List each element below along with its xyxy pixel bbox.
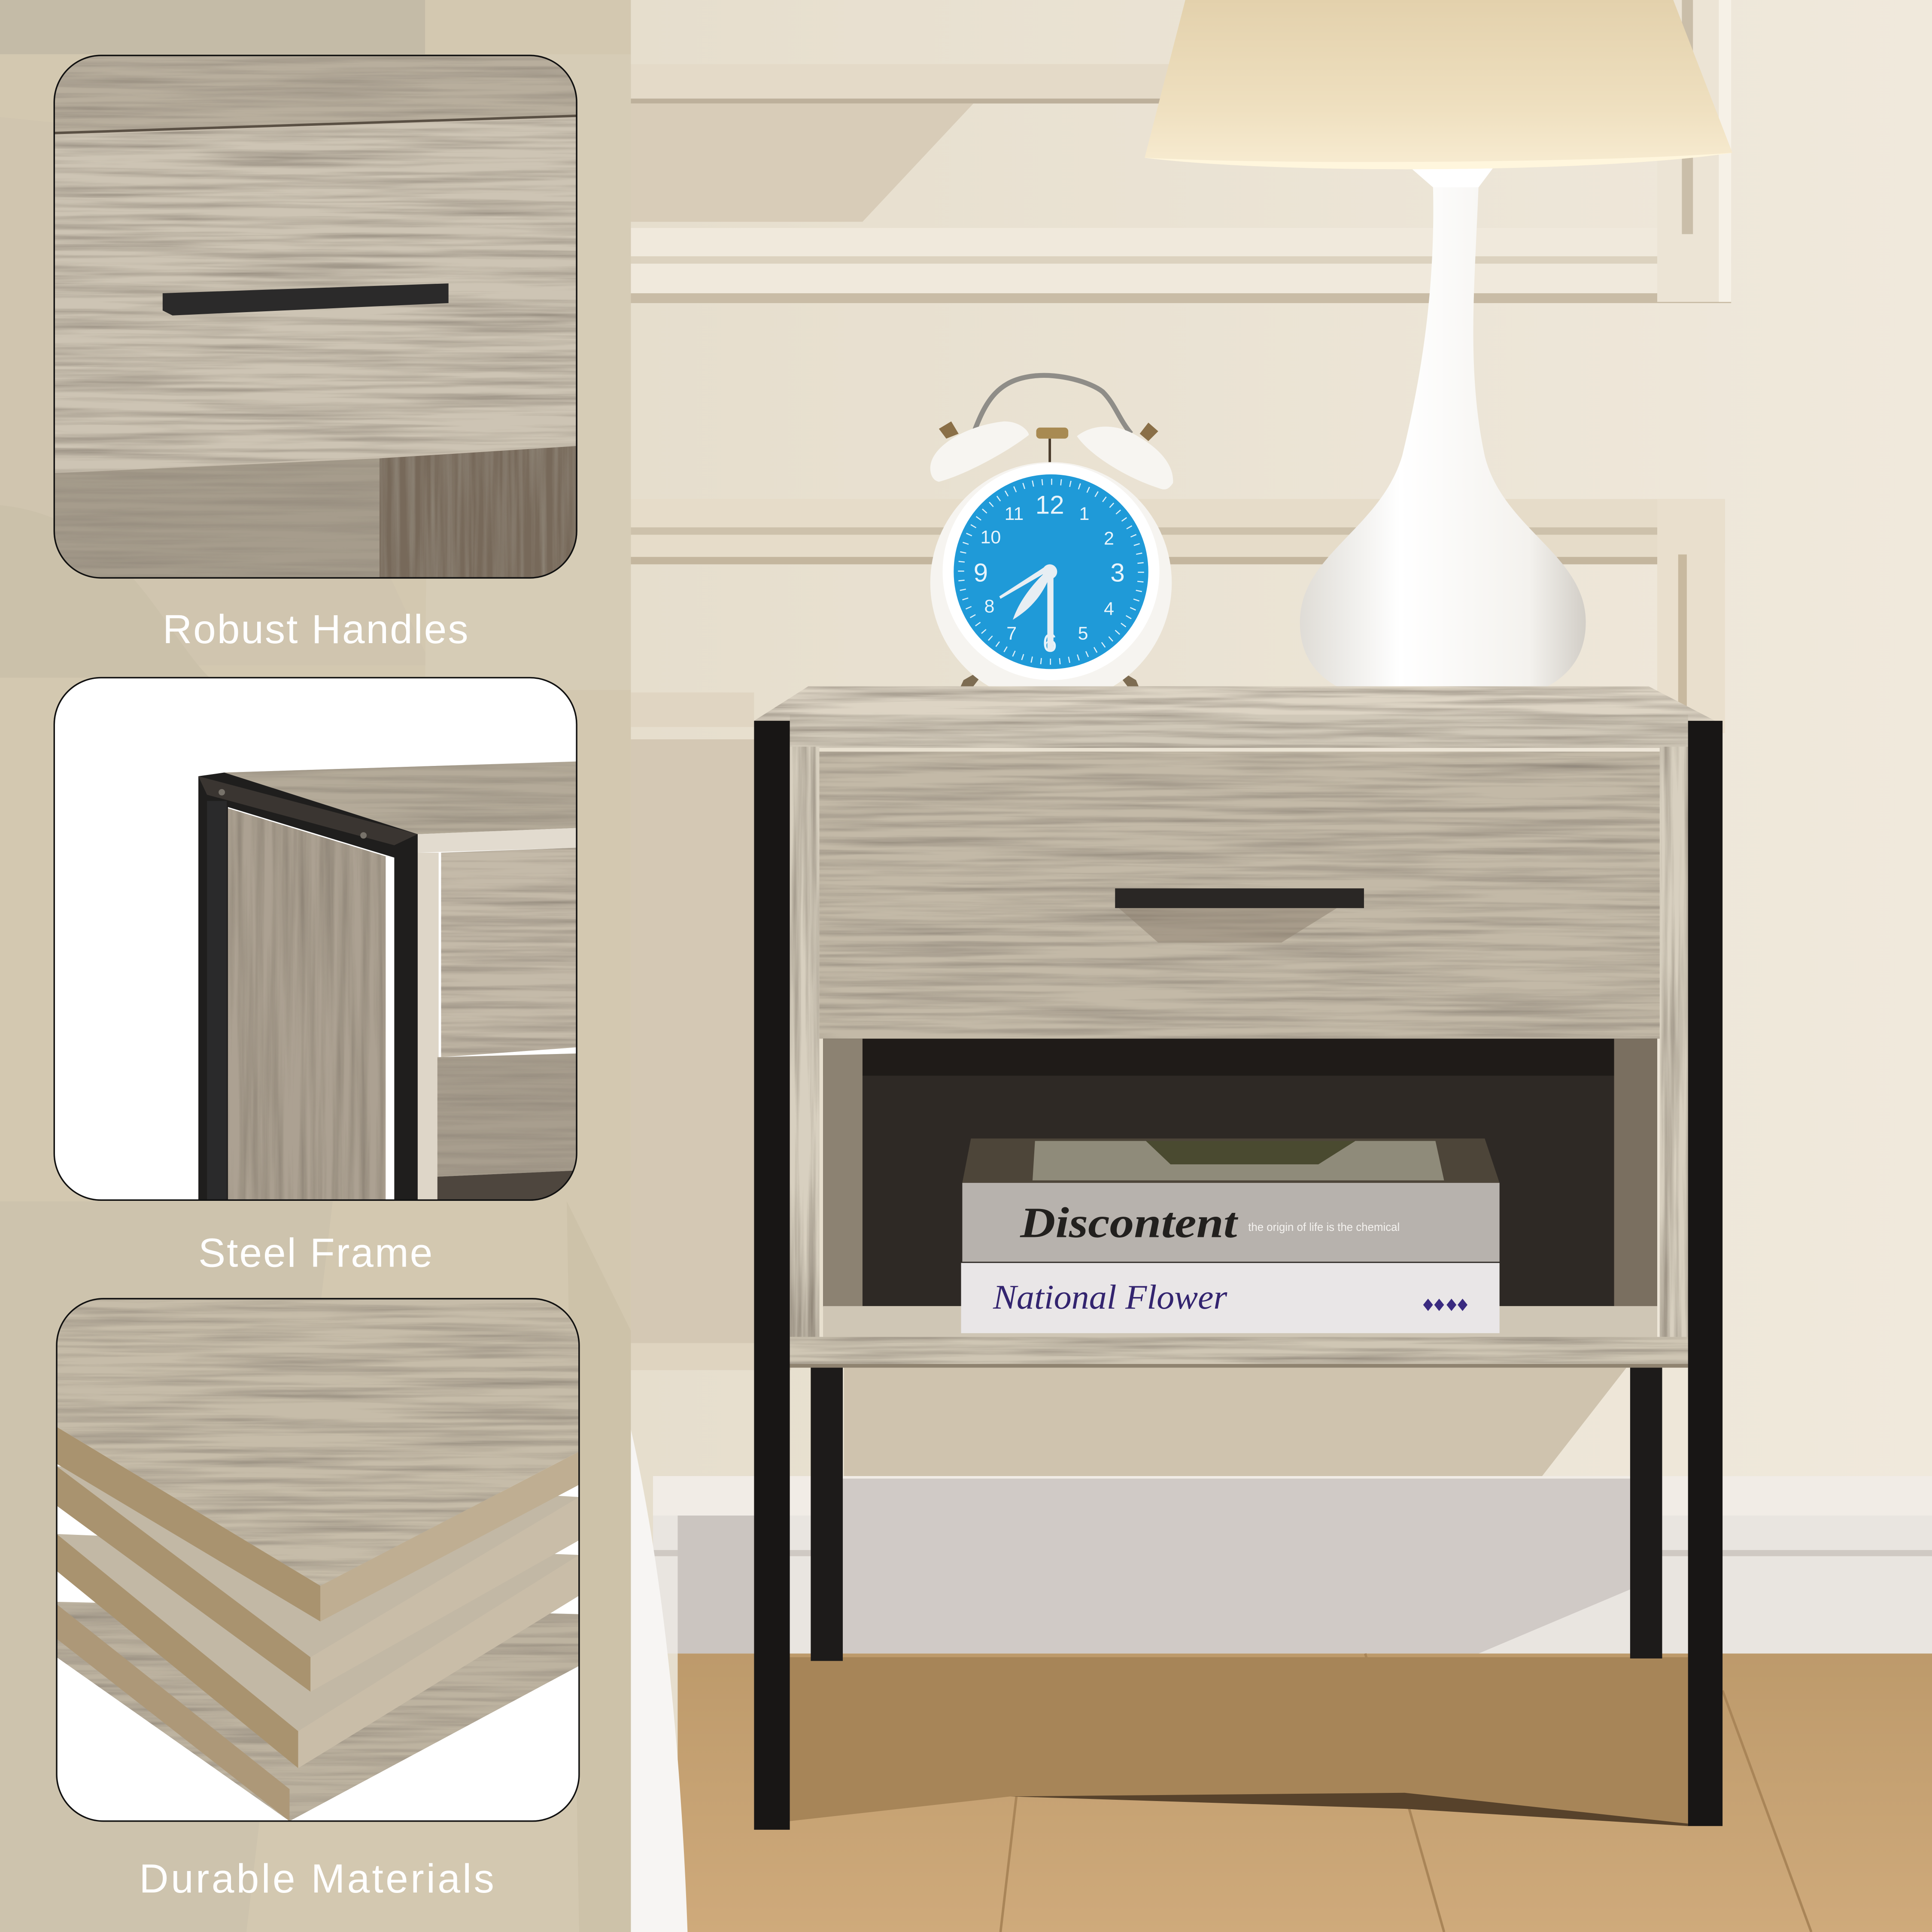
front wood [418,853,439,1200]
top book cover [962,1139,1500,1183]
numerals: 4 [1104,598,1114,619]
bail handle [973,375,1131,434]
steel frame [198,772,418,1200]
panel: robust handles [54,55,577,578]
lower shelf [54,459,380,578]
table top [224,762,577,834]
numerals: 1 [1079,504,1089,524]
numerals: 2 [1104,528,1114,549]
back legs [811,1361,843,1661]
numerals: 9 [974,558,988,587]
blue dial [954,474,1148,669]
lamp shade [1145,0,1732,169]
books: the origin of life is the chemical [1248,1220,1400,1233]
diamonds [1423,1299,1467,1311]
wall mouldings [631,0,1731,1479]
board 2 [57,1466,579,1692]
dark side panel [380,446,577,578]
top surface [57,1299,579,1586]
wood floor [677,1653,1932,1932]
numerals [974,490,1125,657]
panel: durable materials [57,1299,579,1821]
clock body [930,462,1172,704]
open cavity [823,1039,1657,1307]
numerals: 11 [1005,504,1024,524]
numerals: 12 [1036,490,1064,519]
books [961,1139,1500,1333]
nightstand [754,687,1722,1830]
board 3 [57,1534,579,1768]
label: Steel Frame: Steel Frame [198,1230,432,1276]
minute ticks [961,482,1141,662]
numerals: 7 [1006,623,1017,644]
drawer [441,848,577,1057]
board 4 [57,1602,579,1821]
side panels [790,747,819,1338]
room background [631,0,1932,1932]
drawer [819,752,1660,1039]
numerals: 5 [1078,623,1088,644]
label: Durable Materials: Durable Materials [139,1856,494,1902]
spine: Discontent [962,1183,1500,1262]
books: Discontent [1020,1198,1239,1246]
bed sheet [631,1429,687,1932]
top board [54,55,577,133]
drawer front [54,118,577,473]
drawer handle [163,283,449,316]
alarm clock [930,375,1173,707]
books: National Flower [993,1278,1227,1316]
side panel wood [228,808,386,1200]
hammer [1036,428,1068,439]
numerals: 6 [1042,628,1057,657]
bells [930,422,1029,482]
panel: steel frame [54,677,577,1200]
table top surface [754,687,1715,721]
front legs [754,721,790,1830]
left sidebar [0,0,631,1932]
hands [999,564,1057,650]
numerals: 10 [980,527,1001,548]
label: Robust Handles: Robust Handles [163,607,468,652]
feet [951,665,990,707]
numerals: 8 [984,596,994,617]
lamp base [1300,185,1586,706]
lower shelf [823,1306,1657,1338]
numerals: 3 [1110,558,1125,587]
lamp [1145,0,1732,706]
drawer handle [1115,888,1364,942]
top front edge [790,715,1688,748]
baseboard [653,1476,1932,1653]
knobs [939,422,959,439]
spine: National Flower [961,1263,1500,1333]
board 1 side [57,1427,320,1622]
